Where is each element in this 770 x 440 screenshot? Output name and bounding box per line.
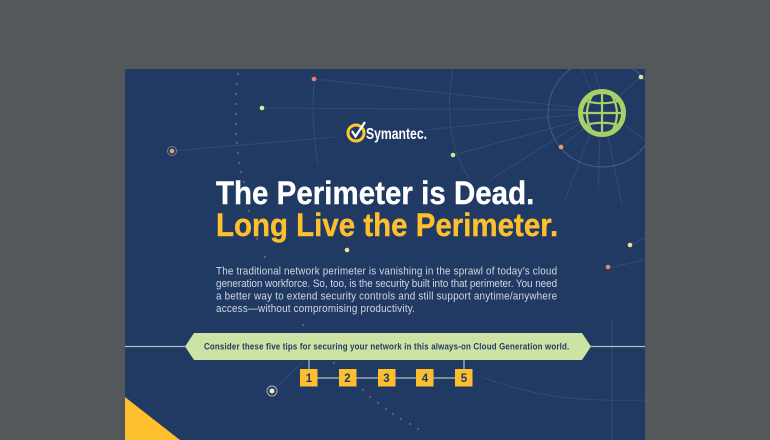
banner connector lines — [125, 346, 645, 378]
logo: Symantec — [348, 122, 427, 143]
intro text — [216, 266, 557, 315]
logo: Symantec: Symantec. — [366, 126, 427, 143]
numbered tips — [300, 369, 472, 386]
numbered tips: 4 — [422, 373, 429, 385]
icon: globe — [580, 92, 624, 135]
dotted arc — [235, 73, 419, 430]
title: The Perimeter is Dead. — [216, 175, 534, 211]
banner: Consider these five tips for securing your network in this always-on Cloud Generation world. — [204, 341, 569, 352]
title — [216, 175, 558, 243]
numbered tips: 2 — [344, 373, 351, 385]
panel: navy background — [125, 69, 645, 440]
intro text: generation workforce. So, too, is the security built into that perimeter. You need — [216, 279, 557, 290]
numbered tips: 5 — [461, 373, 468, 385]
icon: logo check mark — [348, 122, 365, 141]
intro text: The traditional network perimeter is vanishing in the sprawl of today’s cloud — [216, 266, 557, 278]
banner — [185, 333, 591, 360]
intro text: a better way to extend security controls and still support anytime/anywhere — [216, 291, 557, 303]
intro text: access—without compromising productivity. — [216, 304, 415, 315]
network lines — [172, 59, 656, 440]
numbered tips: 1 — [306, 373, 313, 385]
yellow corner triangle — [125, 397, 180, 440]
title: Long Live the Perimeter. — [216, 207, 558, 243]
network nodes — [168, 75, 643, 396]
numbered tips: 3 — [383, 373, 390, 385]
